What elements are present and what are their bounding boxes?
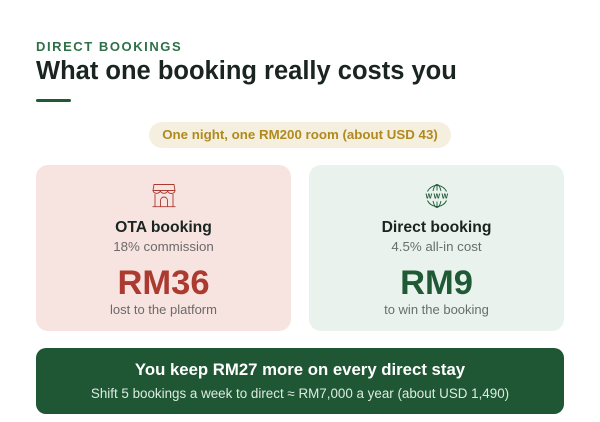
scenario pill: One night, one RM200 room (about USD 43) — [162, 127, 438, 142]
banner detail: Shift 5 bookings a week to direct ≈ RM7,000 a year (about USD 1,490) — [91, 386, 509, 401]
icon: www globe: WWW — [425, 194, 450, 201]
Direct amount: RM9 — [400, 264, 473, 302]
callout: savings banner — [36, 348, 564, 414]
Direct heading: Direct booking — [382, 219, 491, 236]
title: What one booking really costs you — [36, 57, 457, 85]
OTA caption: lost to the platform — [110, 302, 217, 317]
eyebrow heading: DIRECT BOOKINGS — [36, 39, 182, 54]
icon: storefront — [152, 184, 176, 208]
title accent bar — [36, 99, 71, 102]
banner headline: You keep RM27 more on every direct stay — [135, 360, 465, 379]
panel: Direct booking — [309, 165, 564, 331]
icon: www globe — [425, 184, 450, 208]
OTA amount: RM36 — [117, 264, 210, 302]
OTA heading: OTA booking — [115, 219, 212, 236]
OTA commission: 18% commission — [113, 239, 214, 254]
panel: OTA booking — [36, 165, 291, 331]
scenario pill — [149, 122, 451, 148]
Direct cost: 4.5% all-in cost — [391, 239, 482, 254]
Direct caption: to win the booking — [384, 302, 489, 317]
